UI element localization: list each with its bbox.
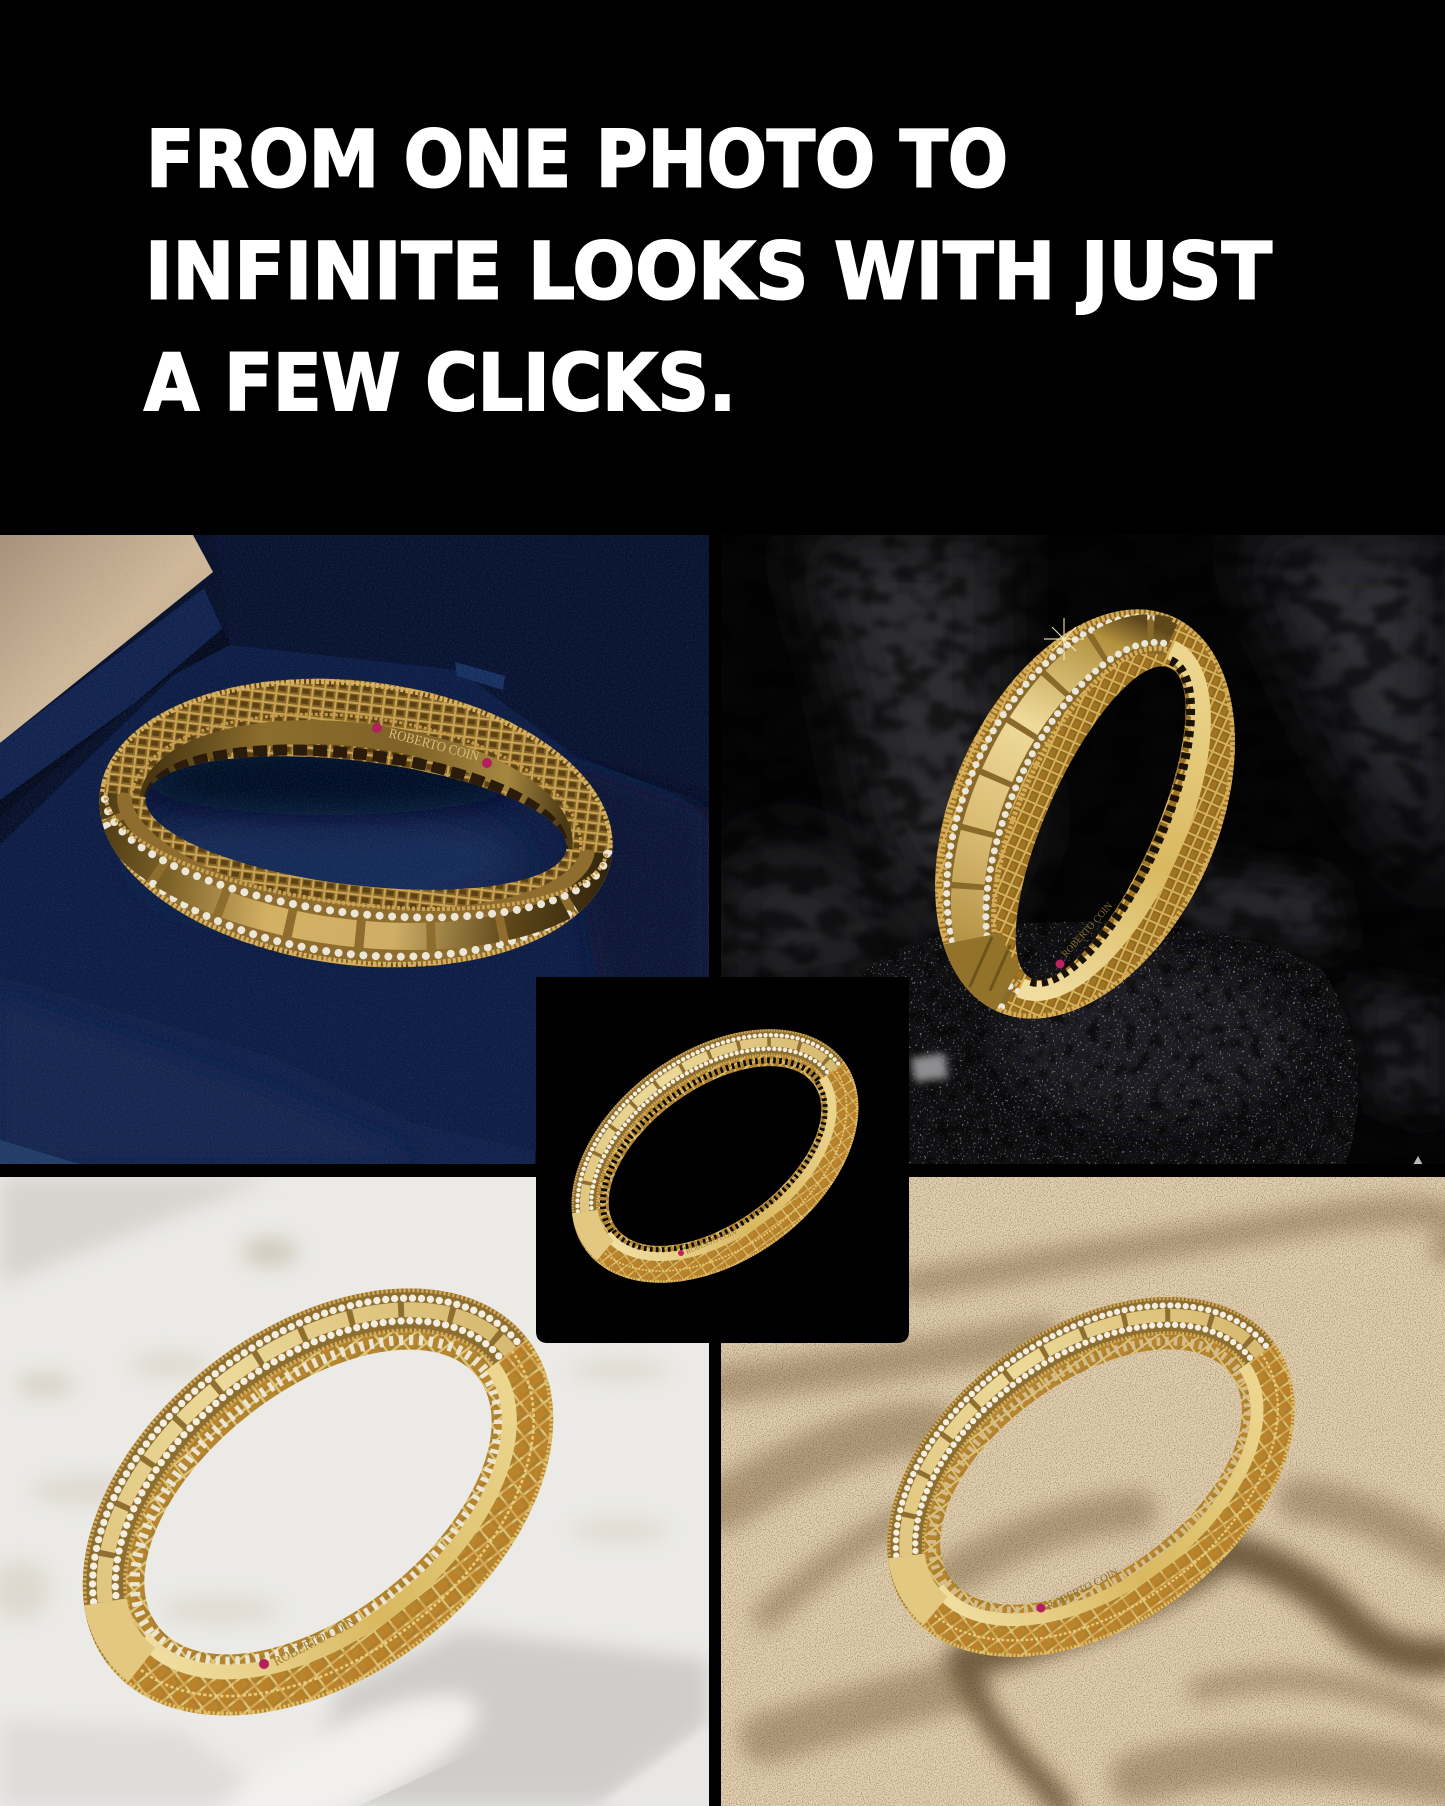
bangle: navy box view <box>99 678 613 968</box>
panel: bangle on black lava rock with baroque fabric <box>721 535 1445 1170</box>
panel: bangle in navy velvet box <box>0 535 709 1164</box>
panel: bangle on rippled sand <box>720 1177 1445 1806</box>
title: INFINITE LOOKS WITH JUST <box>145 228 1272 318</box>
bangle: center product view <box>524 977 906 1335</box>
bangle: marble view <box>1 1201 635 1803</box>
title: FROM ONE PHOTO TO <box>146 116 1008 206</box>
title <box>144 116 1272 429</box>
bangle: lava rock view <box>935 609 1235 1019</box>
bangle: sand view <box>820 1223 1362 1731</box>
contact shadow <box>300 1630 709 1806</box>
icon: small corner triangle <box>1414 1156 1422 1164</box>
title: A FEW CLICKS. <box>144 339 736 429</box>
engraving: Roberto Coin on navy view: ROBERTO COIN <box>387 726 481 765</box>
panel: center original product photo <box>536 977 909 1343</box>
engraving: Roberto Coin on marble view: ROBERTO COIN <box>271 1614 359 1669</box>
lava rock <box>855 920 1365 1170</box>
icon: sparkle on bangle <box>1044 618 1084 660</box>
engraving: Roberto Coin on center view: ROBERTO COIN <box>685 1228 738 1256</box>
panel: bangle on white marble <box>0 1177 709 1806</box>
engraving: Roberto Coin on sand view: ROBERTO COIN <box>1045 1566 1121 1613</box>
engraving: Roberto Coin on rock view: ROBERTO COIN <box>1060 901 1115 960</box>
icon: fabric ribbon tab <box>455 662 505 690</box>
